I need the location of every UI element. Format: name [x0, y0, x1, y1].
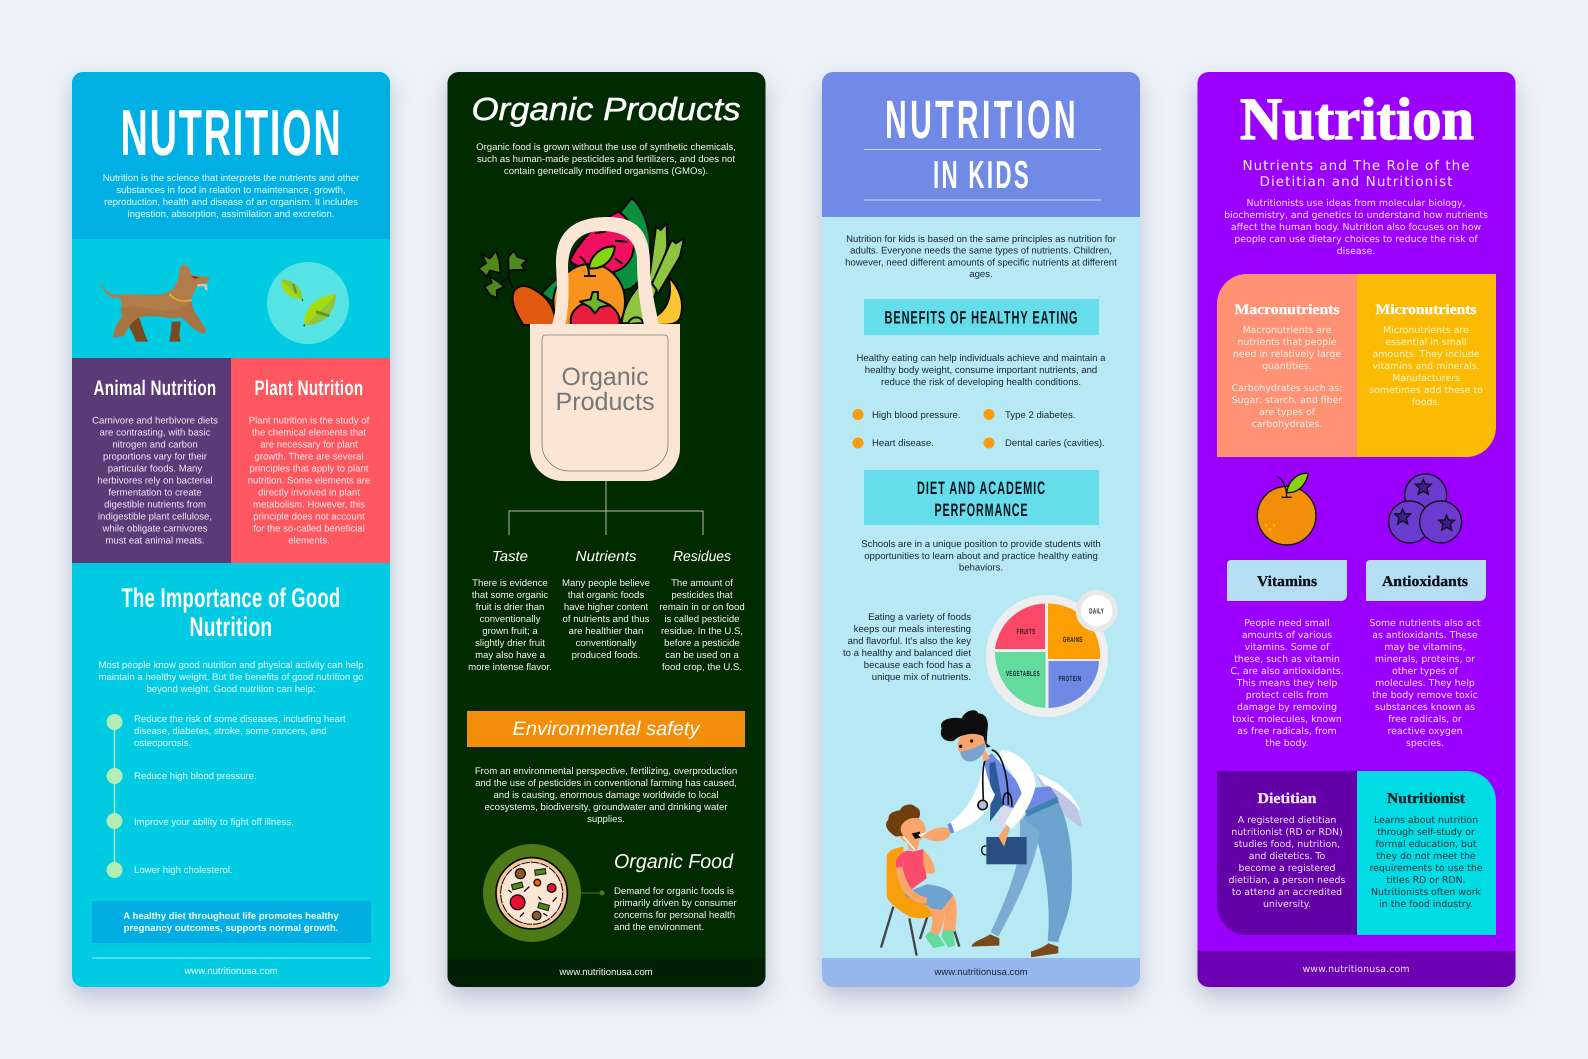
bullet list: [852, 409, 1105, 449]
callout: [92, 901, 371, 943]
tomato: [571, 292, 620, 325]
panel: nutritionist: in the food industry.: [1379, 899, 1473, 910]
text block: schools: Schools are in a unique position to provide students with: [861, 539, 1101, 550]
chart: food plate: VEGETABLES: [1006, 669, 1040, 678]
panel: nutritionist: titles RD or RDN.: [1386, 875, 1466, 886]
text block: vitamins: protect cells from: [1246, 690, 1328, 701]
column: residues: The amount of: [671, 578, 733, 589]
bullet list: Heart disease.: [872, 438, 934, 449]
timeline list: Reduce the risk of some diseases, including heart: [134, 714, 346, 725]
panel: micronutrients: sometimes add these to: [1369, 385, 1483, 396]
text block: organic food: Demand for organic foods is: [614, 886, 734, 897]
illustration: doctor examining child: [881, 710, 1082, 957]
column: residues: residue. In the U.S,: [661, 626, 743, 637]
intro text: Nutrition is the science that interprets the nutrients and other: [103, 173, 360, 184]
heading: importance of good nutrition: The Importance of Good: [122, 583, 340, 613]
footer url: www.nutritionusa.com: [558, 967, 653, 978]
column: taste: grown fruit; a: [482, 626, 538, 637]
callout: A healthy diet throughout life promotes healthy: [123, 911, 339, 922]
column: nutrients: conventionally: [576, 638, 637, 649]
text block: vitamins: amounts of various: [1242, 630, 1332, 641]
panel: micronutrients: foods.: [1412, 397, 1440, 408]
column: taste: may also have a: [475, 650, 546, 661]
panel: plant nutrition: Plant Nutrition: [254, 377, 364, 400]
title: NUTRITION: [120, 96, 342, 169]
heading: importance of good nutrition: Nutrition: [190, 612, 272, 642]
text block: environmental perspective: ecosystems, biodiversity, groundwater and drinking water: [485, 802, 728, 813]
intro text: ages.: [969, 269, 993, 280]
panel: animal nutrition: indigestible plant cellulose,: [98, 512, 212, 522]
panel: macronutrients: nutrients that people: [1237, 337, 1337, 348]
title: Organic Products: [472, 91, 740, 127]
text block: variety of foods: because each food has a: [864, 660, 972, 671]
label: vitamins: [1227, 560, 1347, 601]
column: nutrients: produced foods.: [572, 650, 640, 661]
panel: nutrition overview card: [72, 72, 390, 987]
panel: dietitian: studies food, nutrition,: [1234, 839, 1340, 850]
text block: vitamins: C, are also antioxidants.: [1230, 666, 1344, 677]
icon: orange: [1257, 473, 1316, 545]
panel: macronutrients: Carbohydrates such as:: [1232, 383, 1342, 394]
text block: schools: opportunities to learn about and practice healthy eating: [864, 551, 1098, 562]
panel: animal nutrition: herbivores rely on bacterial: [97, 476, 213, 486]
panel: plant nutrition: principle does not account: [253, 512, 365, 522]
doctor: [922, 710, 1082, 957]
column: residues: pesticides that: [671, 590, 733, 601]
panel: dietitian: and dietetics. To: [1249, 851, 1326, 862]
timeline list: [106, 714, 346, 878]
text block: variety of foods: keeps our meals interesting: [854, 624, 971, 635]
text block: vitamins: as free radicals, from: [1237, 726, 1337, 737]
orange: [553, 264, 625, 325]
intro text: Nutrition for kids is based on the same principles as nutrition for: [846, 234, 1117, 245]
panel: micronutrients: Micronutrients: [1376, 302, 1477, 318]
text block: antioxidants: free radicals, or: [1388, 714, 1462, 725]
panel: dietitian: dietitian, a person needs: [1229, 875, 1345, 886]
text block: organic food: and the environment.: [614, 922, 704, 933]
text block: antioxidants: as antioxidants. These: [1372, 630, 1478, 641]
panel: animal nutrition: are contrasting, with basic: [100, 428, 211, 438]
panel: plant nutrition: [248, 377, 370, 546]
panel: animal nutrition: nitrogen and carbon: [112, 440, 198, 450]
panel: dietitian: to attend an accredited: [1232, 887, 1342, 898]
icon: leaves in circle: [267, 262, 349, 344]
text block: healthy eating: Healthy eating can help individuals achieve and maintain a: [856, 353, 1106, 364]
column: taste: Taste: [492, 549, 528, 565]
timeline list: Reduce high blood pressure.: [134, 771, 257, 782]
timeline list: Improve your ability to fight off illness.: [134, 817, 294, 828]
text block: environmental perspective: and is causing, enormous damage worldwide to local: [493, 790, 719, 801]
text block: vitamins: People need small: [1244, 618, 1330, 629]
text block: antioxidants: the body remove toxic: [1372, 690, 1478, 701]
heading: diet and academic performance: PERFORMANCE: [934, 500, 1028, 520]
bullet list: Dental caries (cavities).: [1005, 438, 1105, 449]
icon: bag of groceries: [478, 198, 684, 481]
panel: dietitian: [1217, 771, 1357, 935]
text block: schools: behaviors.: [959, 563, 1003, 574]
panel: micronutrients: Micronutrients are: [1383, 325, 1469, 336]
intro text: ingestion, absorption, assimilation and excretion.: [128, 209, 334, 220]
panel: micronutrients: vitamins and minerals.: [1372, 361, 1480, 372]
child on chair: [881, 804, 959, 956]
column: residues: before a pesticide: [664, 638, 740, 649]
panel: micronutrients: Manufacturers: [1392, 373, 1460, 384]
panel: animal nutrition: Carnivore and herbivore diets: [92, 416, 218, 426]
panel: dietitian: become a registered: [1239, 863, 1335, 874]
panel: animal nutrition: digestible nutrients from: [104, 500, 206, 510]
banner: environmental safety: [467, 711, 745, 747]
panel: macronutrients: Macronutrients: [1234, 302, 1340, 318]
panel: nutritionist: [1357, 771, 1496, 935]
title: NUTRITION: [885, 90, 1079, 150]
panel: dietitian: Dietitian: [1258, 791, 1317, 807]
panel: plant nutrition: are necessary for plant: [260, 440, 358, 450]
intro text: such as human-made pesticides and fertilizers, and does not: [477, 154, 735, 165]
panel: animal nutrition: [92, 377, 218, 546]
tote bag: Products: [556, 388, 654, 416]
icon: pizza: [483, 844, 604, 942]
intro text: contain genetically modified organisms (GMOs).: [504, 166, 708, 177]
label: antioxidants: [1366, 560, 1486, 601]
title: [864, 90, 1101, 200]
column: taste: more intense flavor.: [468, 662, 552, 673]
column: residues: [659, 549, 745, 673]
panel: dietitian: nutritionist (RD or RDN): [1231, 827, 1343, 838]
panel: plant nutrition: Plant nutrition is the study of: [249, 416, 370, 426]
panel: animal nutrition: fermentation to create: [108, 488, 202, 498]
intro text: reproduction, health and disease of an organism. It includes: [104, 197, 358, 208]
heading: benefits of healthy eating: [864, 299, 1099, 335]
heading: importance of good nutrition: [122, 583, 340, 642]
panel: macronutrients: Macronutrients are: [1243, 325, 1332, 336]
text block: antioxidants: reactive oxygen: [1387, 726, 1463, 737]
intro text: disease.: [1337, 246, 1375, 257]
leaf and sweet potato: [542, 198, 650, 303]
heading: diet and academic performance: DIET AND ACADEMIC: [917, 478, 1046, 498]
intro text: however, need different amounts of specific nutrients at different: [845, 257, 1117, 268]
heading: benefits of healthy eating: BENEFITS OF HEALTHY EATING: [884, 308, 1078, 328]
text block: antioxidants: Some nutrients also act: [1369, 618, 1481, 629]
column: taste: conventionally: [480, 614, 541, 625]
chart: food plate: FRUITS: [1016, 627, 1036, 636]
panel: macronutrients: quantities.: [1262, 361, 1312, 372]
text block: antioxidants: substances known as: [1375, 702, 1475, 713]
column: nutrients: of nutrients and thus: [563, 614, 650, 625]
intro text: people can use dietary choices to reduce the risk of: [1234, 234, 1478, 245]
panel: plant nutrition: elements.: [288, 536, 330, 546]
column: residues: can be used on a: [665, 650, 739, 661]
panel: animal nutrition: while obligate carnivores: [101, 524, 208, 534]
leek: [622, 223, 684, 323]
title: IN KIDS: [933, 154, 1031, 197]
timeline list: Lower high cholesterol.: [134, 865, 233, 876]
column: residues: food crop, the U.S.: [662, 662, 742, 673]
text block: environmental perspective: and the use of pesticides in conventional farming has caused,: [475, 778, 737, 789]
text block: vitamins: the body.: [1265, 738, 1309, 749]
text block: good nutrition intro: beyond weight. Good nutrition can help:: [146, 684, 316, 695]
intro text: Nutritionists use ideas from molecular biology,: [1246, 198, 1466, 209]
panel: nutrients and dietitian card: [1198, 72, 1516, 987]
panel: nutritionist: Nutritionists often work: [1371, 887, 1482, 898]
text block: vitamins: This means they help: [1236, 678, 1337, 689]
intro text: Organic food is grown without the use of synthetic chemicals,: [476, 142, 736, 153]
panel: nutritionist: they do not meet the: [1376, 851, 1476, 862]
column: nutrients: [562, 549, 650, 661]
panel: nutritionist: through self-study or: [1377, 827, 1475, 838]
panel: nutritionist: Nutritionist: [1387, 791, 1465, 807]
tote bag: Organic: [562, 363, 648, 391]
text block: good nutrition intro: Most people know good nutrition and physical activity can help: [98, 660, 364, 671]
column: taste: There is evidence: [472, 578, 548, 589]
panel: macronutrients: carbohydrates.: [1252, 419, 1322, 430]
footer url: www.nutritionusa.com: [1302, 964, 1410, 975]
text block: organic food: [614, 851, 737, 933]
text block: antioxidants: molecules. They help: [1375, 678, 1475, 689]
panel: animal nutrition: Animal Nutrition: [94, 377, 216, 400]
text block: vitamins: toxic molecules, known: [1232, 714, 1342, 725]
footer url: www.nutritionusa.com: [183, 966, 278, 977]
carrot: [478, 251, 556, 325]
panel: nutritionist: formal education, but: [1375, 839, 1477, 850]
panel: plant nutrition: nutrition. Some elements are: [248, 476, 370, 486]
panel: plant nutrition: the chemical elements that: [252, 428, 366, 438]
panel: dietitian: university.: [1263, 899, 1311, 910]
panel: organic products card: [448, 72, 766, 987]
panel: macronutrients: are types of: [1259, 407, 1316, 418]
banana: [655, 277, 682, 325]
bullet list: Type 2 diabetes.: [1005, 410, 1075, 421]
text block: variety of foods: and flavorful. It's also the key: [848, 636, 971, 647]
chart: food plate: PROTEIN: [1058, 674, 1082, 683]
intro text: substances in food in relation to maintenance, growth,: [116, 185, 346, 196]
text block: variety of foods: unique mix of nutrients.: [872, 672, 971, 683]
panel: macronutrients: Sugar, starch, and fiber: [1232, 395, 1342, 406]
text block: variety of foods: Eating a variety of foods: [868, 612, 971, 623]
heading: diet and academic performance: [864, 470, 1099, 525]
footer url: www.nutritionusa.com: [933, 967, 1028, 978]
panel: dietitian: A registered dietitian: [1238, 815, 1336, 826]
timeline list: osteoporosis.: [134, 738, 191, 749]
text block: antioxidants: other types of: [1392, 666, 1459, 677]
title: Nutrition: [1240, 86, 1474, 152]
column: taste: slightly drier fruit: [475, 638, 545, 649]
panel: animal nutrition: proportions vary for their: [103, 452, 208, 462]
text block: antioxidants: species.: [1406, 738, 1444, 749]
text block: variety of foods: to a healthy and balanced diet: [843, 648, 971, 659]
chart: food plate: [986, 590, 1118, 717]
panel: macronutrients: need in relatively large: [1233, 349, 1341, 360]
text block: healthy eating: healthy body weight, consume important nutrients, and: [865, 365, 1097, 376]
text block: vitamins: these, such as vitamin: [1234, 654, 1340, 665]
label: vitamins: Vitamins: [1257, 574, 1317, 590]
subtitle: Dietitian and Nutritionist: [1260, 174, 1452, 190]
tote bag: [530, 217, 680, 481]
column: residues: is called pesticide: [664, 614, 740, 625]
text block: vitamins: damage by removing: [1237, 702, 1337, 713]
intro text: affect the human body. Nutrition also focuses on how: [1231, 222, 1481, 233]
panel: micronutrients: [1357, 274, 1496, 457]
banner: environmental safety: Environmental safety: [512, 718, 701, 740]
intro text: biochemistry, and genetics to understand how nutrients: [1224, 210, 1488, 221]
panel: plant nutrition: for the so-called beneficial: [253, 524, 365, 534]
timeline list: disease, diabetes, stroke, some cancers, and: [134, 726, 327, 737]
column: residues: Residues: [673, 549, 731, 565]
text block: organic food: primarily driven by consumer: [614, 898, 737, 909]
text block: organic food: Organic Food: [614, 851, 734, 873]
panel: plant nutrition: directly involved in plant: [258, 488, 360, 498]
panel: plant nutrition: growth. There are several: [254, 452, 364, 462]
panel: micronutrients: essential in small: [1385, 337, 1467, 348]
column: taste: that some organic: [472, 590, 548, 601]
panel: plant nutrition: metabolism. However, this: [253, 500, 365, 510]
column: nutrients: have higher content: [564, 602, 648, 613]
panel: animal nutrition: particular foods. Many: [108, 464, 202, 474]
text block: vitamins: vitamins. Some of: [1245, 642, 1330, 653]
panel: micronutrients: amounts. They include: [1373, 349, 1480, 360]
icon: blueberries: [1389, 474, 1462, 543]
column: taste: fruit is drier than: [476, 602, 544, 613]
bullet list: High blood pressure.: [872, 410, 961, 421]
callout: pregnancy outcomes, supports normal growth.: [124, 923, 338, 934]
subtitle: [1242, 158, 1470, 190]
intro text: adults. Everyone needs the same types of nutrients. Children,: [850, 246, 1112, 257]
subtitle: Nutrients and The Role of the: [1242, 158, 1470, 174]
chart: food plate: DAILY: [1089, 606, 1104, 616]
panel: nutritionist: requirements to use the: [1369, 863, 1483, 874]
panel: macronutrients: [1217, 274, 1357, 457]
column: nutrients: Nutrients: [576, 549, 636, 565]
text block: healthy eating: reduce the risk of developing health conditions.: [881, 377, 1081, 388]
orange stem and leaf: [580, 246, 615, 276]
label: antioxidants: Antioxidants: [1382, 574, 1468, 590]
text block: antioxidants: may be vitamins,: [1384, 642, 1466, 653]
column: nutrients: Many people believe: [562, 578, 650, 589]
chart: food plate: GRAINS: [1063, 635, 1083, 644]
column: nutrients: are healthier than: [569, 626, 643, 637]
icon: dog: [100, 265, 210, 342]
panel: nutrition in kids card: [822, 72, 1140, 987]
text block: good nutrition intro: maintain a healthy weight. But the benefits of good nutrition go: [98, 672, 364, 683]
panel: animal nutrition: must eat animal meats.: [105, 536, 205, 546]
column: nutrients: that organic foods: [568, 590, 644, 601]
text block: organic food: concerns for personal health: [614, 910, 735, 921]
text block: environmental perspective: From an environmental perspective, fertilizing, overproduction: [475, 766, 737, 777]
text block: antioxidants: minerals, proteins, or: [1375, 654, 1475, 665]
column: residues: remain in or on food: [659, 602, 745, 613]
text block: environmental perspective: supplies.: [587, 814, 625, 825]
panel: nutritionist: Learns about nutrition: [1374, 815, 1478, 826]
panel: plant nutrition: principles that apply to plant: [250, 464, 369, 474]
column: taste: [468, 549, 552, 673]
